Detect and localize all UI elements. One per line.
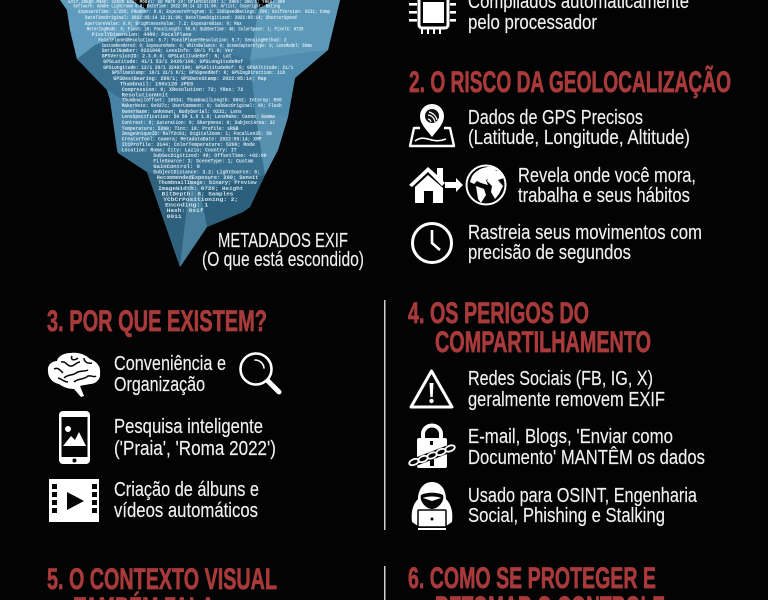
text: smart search: Pesquisa inteligente (114, 415, 263, 438)
embedded metadata code text: CustomRendered: 0; ExposureMode: 0; WhiteBalance: 0; SceneCaptureType: 0; LensModel: 50mm (102, 43, 312, 49)
embedded metadata code text: Encoding: 1 (165, 202, 208, 208)
text: smart search (114, 415, 276, 460)
text: social networks remove EXIF: Redes Sociais (FB, IG, X) (468, 367, 653, 390)
embedded metadata code text: ThumbnailImage: binary; Preview (158, 180, 257, 186)
embedded metadata code text: GPSTimeStamp: 10/1 31/1 8/1; GPSSpeedRef: K; GPSImgDirection: 118 (112, 70, 285, 76)
icon: film strip with play button (49, 479, 99, 522)
text: compiled by processor (468, 0, 689, 34)
text: tracks movements: Rastreia seus movimentos com (468, 221, 702, 244)
embedded metadata code text: SerialNumber: 0231040; LensInfo: 50/1 f1.8; Ver (102, 48, 233, 54)
text: tracks movements: precisão de segundos (468, 241, 631, 264)
icon: smartphone with photo (59, 411, 90, 464)
heading: section 4: 4. OS PERIGOS DO (408, 297, 589, 330)
text: convenience: Conveniência e (114, 352, 226, 375)
text: OSINT and stalking: Usado para OSINT, Engenharia (468, 484, 697, 507)
icon: magnifying glass (240, 354, 279, 392)
text: GPS data: (Latitude, Longitude, Altitude) (468, 126, 690, 149)
embedded metadata code text: OwnerName: unknown; BodySerial: 0231; Lens (122, 109, 242, 115)
text: GPS data (468, 106, 690, 149)
embedded metadata code text: GPSLongitude: 12/1 29/1 3240/100; GPSAltitudeRef: 0; GPSAltitude: 21/1 (103, 65, 293, 71)
heading: section 4: COMPARTILHAMENTO (435, 326, 651, 359)
embedded metadata code text (68, 0, 330, 220)
icon: processor chip (409, 0, 456, 34)
icon: warning triangle (411, 371, 452, 407)
text: tracks movements (468, 221, 702, 264)
embedded metadata code text: Contrast: 0; Saturation: 0; Sharpness: 0; SubjectArea: 32 (122, 120, 275, 126)
embedded metadata code text: ApertureValue: 6.0; BrightnessValue: 7.2; ExposureBias: 0; Max (85, 21, 242, 27)
text: email and blogs keep data: E-mail, Blogs, 'Enviar como (468, 425, 673, 448)
text: reveals where you live: Revela onde você mora, (518, 164, 696, 187)
heading: section 5 (47, 563, 277, 600)
text: email and blogs keep data: Documento' MANTÊM os dados (468, 446, 705, 469)
text: GPS data: Dados de GPS Precisos (468, 106, 643, 129)
text: albums and videos: vídeos automáticos (114, 499, 258, 522)
embedded metadata code text: GPSDestBearing: 298/1; GPSDateStamp: 2022:05:14; Map (113, 76, 267, 82)
icon: padlock with chain (408, 426, 456, 468)
embedded metadata code text: ImageWidth: 6720; Height (158, 186, 243, 192)
embedded metadata code text: FocalPlaneXResolution: 5.7; FocalPlaneYResolution: 5.7; SensingMethod: 2 (98, 38, 287, 44)
text: reveals where you live (518, 164, 696, 207)
embedded metadata code text: LensSpecification: 50 50 1.8 1.8; LensMake: Canon; Gamma (122, 114, 276, 120)
embedded metadata code text: MeteringMode: 5; Flash: 16; FocalLength: 50.0; SubSecTime: 48; ColorSpace: 1; PixelX: 6720 (87, 26, 303, 32)
embedded metadata code text: BitDepth: 8; Samples (162, 192, 233, 198)
embedded metadata code text: GPSLatitude: 41/1 53/1 2428/100; GPSLongitudeRef (103, 59, 243, 65)
text: compiled by processor: pelo processador (468, 11, 597, 34)
iceberg caption (202, 229, 364, 271)
text: OSINT and stalking: Social, Phishing e Stalking (468, 504, 665, 527)
text: convenience (114, 352, 226, 396)
text: social networks remove EXIF (468, 367, 665, 411)
embedded metadata code text: Thumbnail: 160x120 JPEG (120, 82, 193, 88)
embedded metadata code text: ThumbnailOffset: 10534; ThumbnailLength: 8842; Interop: R98 (122, 98, 282, 104)
text: albums and videos: Criação de álbuns e (114, 478, 259, 501)
vertical divider (384, 300, 386, 530)
embedded metadata code text: ResolutionUnit (122, 92, 168, 98)
embedded metadata code text: DateTimeOriginal: 2022:05:14 12:31:08; DateTimeDigitized: 2022:05:14; ShutterSpeed (85, 15, 297, 21)
iceberg caption: METADADOS EXIF (218, 229, 348, 252)
embedded metadata code text: GPSVersionID: 2.3.0.0; GPSLatitudeRef: N; Lat (102, 54, 232, 60)
embedded metadata code text: MakerNote: 0x927c; UserComment: 0; SubSecOriginal: 48; Flash (122, 103, 282, 109)
text: reveals where you live: trabalha e seus hábitos (518, 184, 690, 207)
icon: hooded hacker with laptop (412, 482, 452, 530)
text: email and blogs keep data (468, 425, 705, 469)
embedded metadata code text: Temperature: 5200; Tint: 10; Profile: sRGB (122, 126, 239, 132)
heading: section 3: 3. POR QUE EXISTEM? (47, 305, 267, 338)
text: albums and videos (114, 478, 259, 522)
embedded metadata code text: ICCProfile: 3144; ColorTemperature: 5200; Mode (122, 142, 255, 148)
embedded metadata code text: 0011 (167, 214, 182, 220)
heading: section 5: 5. O CONTEXTO VISUAL (47, 563, 277, 596)
heading: section 6 (408, 562, 665, 600)
text: convenience: Organização (114, 373, 205, 396)
embedded metadata code text: FileSource: 3; SceneType: 1; Custom (153, 158, 254, 164)
embedded metadata code text: GainControl: 0 (153, 164, 200, 170)
text: social networks remove EXIF: geralmente removem EXIF (468, 388, 665, 411)
embedded metadata code text: ImageUniqueID: 8a7f2c01; DigitalZoom: 1; FocalLen35: 50 (122, 131, 272, 137)
text: smart search: ('Praia', 'Roma 2022') (114, 437, 276, 460)
iceberg illustration (60, 0, 340, 267)
embedded metadata code text: Hash: 0x1f (167, 208, 203, 214)
black notches at top of iceberg (131, 0, 274, 9)
heading: section 4 (408, 297, 651, 359)
embedded metadata code text: YCbCrPositioning: 2; (163, 197, 238, 203)
embedded metadata code text: SubSecDigitized: 48; OffsetTime: +02:00 (153, 153, 267, 159)
icon: house arrow globe (409, 166, 506, 204)
embedded metadata code text: RecommendedExposure: 200; Sensit (157, 175, 258, 181)
embedded metadata code text: Location: Roma; City: Lazio; Country: IT (122, 148, 237, 154)
icon: GPS pin on map (410, 104, 454, 146)
embedded metadata code text: PixelYDimension: 4480; FocalPlane (92, 32, 192, 38)
embedded metadata code text: ExposureTime: 1/250; FNumber: 8.0; ExposureProgram: 3; ISOSpeedRatings: 200; ExifVersion: 0231; Comp (78, 9, 330, 15)
embedded metadata code text: CreatorTool: Camera; MetadataDate: 2022:05:14; XMP (122, 136, 262, 142)
embedded metadata code text: SubjectDistance: 3.2; LightSource: 0; (153, 170, 260, 176)
iceberg caption: (O que está escondido) (202, 248, 364, 271)
embedded metadata code text: Software: Adobe Lightroom 6.0; DateTime: 2022:05:14 12:31:08; Artist; Copyright; Rating (73, 4, 280, 10)
icon: clock (412, 224, 452, 262)
icon: brain (48, 353, 100, 397)
text: OSINT and stalking (468, 484, 697, 527)
embedded metadata code text: Compression: 6; XResolution: 72; YRes: 72 (122, 87, 243, 93)
